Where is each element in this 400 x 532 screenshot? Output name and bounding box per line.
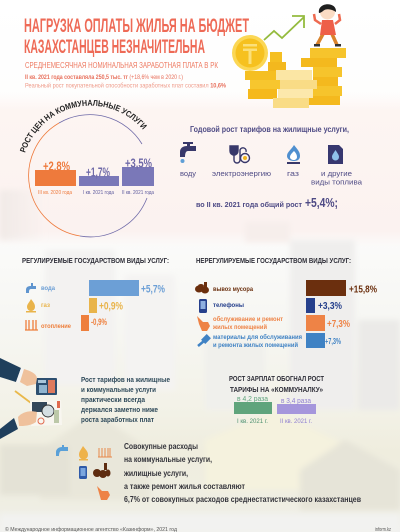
circle outline: orange arc — [29, 123, 80, 236]
hand: lower — [18, 411, 37, 426]
panel: state-regulated services — [22, 258, 169, 331]
value: garbage: +15,8% — [349, 284, 378, 296]
text: total expenses: 6,7% от совокупных расходов среднестатистического казахстанцев — [124, 495, 361, 504]
icon: garbage — [93, 463, 110, 478]
bar: water — [89, 280, 139, 296]
value: repair: +7,3% — [327, 318, 350, 330]
panel: non-regulated services — [195, 258, 378, 349]
value: gas: +0,9% — [99, 300, 123, 312]
total growth: во II кв. 2021 года общий рост — [196, 200, 302, 209]
heading: НЕРЕГУЛИРУЕМЫЕ ГОСУДАРСТВОМ ВИДЫ УСЛУГ: — [196, 258, 351, 265]
total growth — [196, 195, 338, 210]
bar: II quarter 2021 — [122, 167, 154, 186]
icon: radiator — [25, 320, 38, 330]
panel: wages vs communal tariffs — [229, 374, 324, 425]
icon: repair — [97, 486, 110, 500]
label: other fuels — [311, 169, 363, 186]
bar: repair — [306, 315, 325, 331]
icon: pale coin stack — [273, 70, 317, 108]
icon: repair — [197, 316, 210, 331]
heading: РЕГУЛИРУЕМЫЕ ГОСУДАРСТВОМ ВИДЫ УСЛУГ: — [22, 258, 169, 265]
icon: paint roller — [198, 334, 211, 346]
heading: Годовой рост тарифов на жилищные услуги, — [190, 125, 349, 134]
bar: gas — [89, 298, 97, 313]
text: tariffs vs wages: и коммунальные услуги — [81, 385, 156, 394]
label: materials — [213, 333, 302, 349]
heading — [229, 374, 324, 394]
value: materials: +7,3% — [325, 337, 341, 346]
title: КАЗАХСТАНЦЕВ НЕЗНАЧИТЕЛЬНА — [24, 37, 205, 58]
text: total expenses: на коммунальные услуги, — [124, 455, 212, 464]
bar: heating — [81, 315, 89, 331]
icon: phone — [199, 299, 207, 313]
illustration: hands with calculator and bills — [0, 358, 62, 439]
value: II quarter: в 3,4 раза — [281, 398, 311, 405]
intro text: Реальный рост покупательной способности заработных плат составил 10,6% — [25, 82, 227, 90]
value: +1,7%: +1,7% — [86, 164, 110, 180]
icon: tenge coin — [232, 35, 268, 71]
bar: II quarter — [277, 404, 316, 414]
icon: tap — [56, 445, 68, 456]
icon: radiator — [98, 448, 112, 457]
icon: gas flame — [287, 145, 300, 164]
icon: flame — [26, 299, 36, 312]
circle outline: purple arc — [59, 115, 142, 144]
text: tariffs vs wages — [81, 375, 170, 424]
label: materials: материалы для обслуживания — [213, 333, 302, 341]
value: heating: -0,9% — [91, 317, 107, 328]
intro text — [25, 75, 227, 90]
icon: garbage — [195, 282, 209, 294]
icon: flame — [79, 446, 88, 460]
bar: materials — [306, 333, 325, 348]
text: tariffs vs wages: Рост тарифов на жилищные — [81, 375, 170, 384]
icon: tap — [180, 142, 196, 163]
label: other fuels: и другие — [321, 169, 352, 178]
value: I quarter: в 4,2 раза — [237, 394, 269, 403]
illustration: coins, arrow and person — [232, 4, 346, 108]
label: materials: и ремонта жилых помещений — [213, 341, 298, 349]
icon: phone — [79, 466, 87, 479]
icon: plug — [230, 146, 250, 163]
label: water: воду — [180, 169, 196, 178]
bar: garbage — [306, 280, 346, 296]
icon: tap — [26, 283, 36, 293]
intro text: II кв. 2021 года составляла 250,5 тыс. тг (+18,6% чем в 2020 г.) — [25, 75, 183, 81]
label: repair: жилых помещений — [212, 323, 267, 331]
total growth: +5,4%; — [305, 195, 338, 210]
heading: ТАРИФЫ НА «КОММУНАЛКУ» — [230, 385, 323, 394]
background: city and houses — [0, 190, 400, 532]
icon: growth arrow — [264, 16, 304, 40]
calculator — [36, 378, 57, 395]
heading: РОСТ ЗАРПЛАТ ОБОГНАЛ РОСТ — [229, 374, 324, 383]
value: +2,8%: +2,8% — [43, 158, 70, 174]
bar: I quarter 2021 — [79, 176, 119, 186]
value: water: +5,7% — [141, 284, 165, 296]
label: gas: газ — [287, 169, 300, 178]
curved heading — [25, 106, 147, 153]
text: total expenses: а также ремонт жилья составляют — [124, 482, 245, 491]
label: gas: газ — [41, 302, 51, 309]
icon: fuel canister — [328, 145, 343, 164]
label: II quarter: II кв. 2021 г. — [280, 418, 312, 425]
cuff: upper — [16, 368, 24, 383]
text: total expenses: жилищные услуги, — [123, 469, 188, 478]
label: heating: отопление — [41, 323, 71, 330]
panel: total expenses — [56, 442, 361, 504]
bar: phones — [306, 298, 315, 313]
label: repair: обслуживание и ремонт — [213, 315, 283, 323]
sleeve: lower — [0, 418, 18, 439]
background: pink band — [0, 92, 400, 247]
hand: upper — [20, 369, 37, 386]
title — [24, 16, 249, 58]
label: repair — [212, 315, 283, 331]
text: tariffs vs wages: держался заметно ниже — [81, 405, 158, 414]
pencil — [15, 391, 31, 403]
text: tariffs vs wages: роста заработных плат — [81, 415, 154, 424]
text: tariffs vs wages: практически всегда — [81, 395, 146, 404]
bar: III quarter 2020 — [35, 170, 76, 186]
icon: person — [314, 4, 341, 46]
text: total expenses — [123, 442, 361, 504]
sleeve: upper — [0, 358, 21, 382]
document with magnifier — [30, 400, 62, 426]
label: phones: телефоны — [213, 302, 244, 309]
bar: I quarter — [234, 402, 272, 414]
value: phones: +3,3% — [318, 300, 343, 312]
label: III quarter 2020: III кв. 2020 года — [38, 190, 73, 196]
panel: price growth for communal services — [20, 100, 155, 238]
panel: price growth for communal services: РОСТ ЦЕН НА КОММУНАЛЬНЫЕ УСЛУГИ — [20, 100, 147, 152]
icon: right coin stack — [301, 48, 346, 105]
circle outline: lower arc — [80, 198, 147, 237]
label: I quarter: I кв. 2021 г. — [237, 418, 268, 425]
value: +3,5%: +3,5% — [125, 156, 152, 170]
label: other fuels: виды топлива — [311, 178, 363, 186]
label: I quarter 2021: I кв. 2021 года — [83, 190, 115, 196]
subtitle: СРЕДНЕМЕСЯЧНАЯ НОМИНАЛЬНАЯ ЗАРАБОТНАЯ ПЛАТА В РК — [25, 61, 218, 70]
label: water: вода — [41, 285, 55, 292]
label: electricity: электроэнергию — [212, 169, 271, 178]
text: total expenses: Совокупные расходы — [124, 442, 198, 451]
label: garbage: вывоз мусора — [213, 286, 253, 293]
icon: left coin stack — [245, 52, 286, 99]
label: II quarter 2021: II кв. 2021 года — [122, 190, 155, 196]
panel: annual tariff growth — [180, 125, 363, 210]
